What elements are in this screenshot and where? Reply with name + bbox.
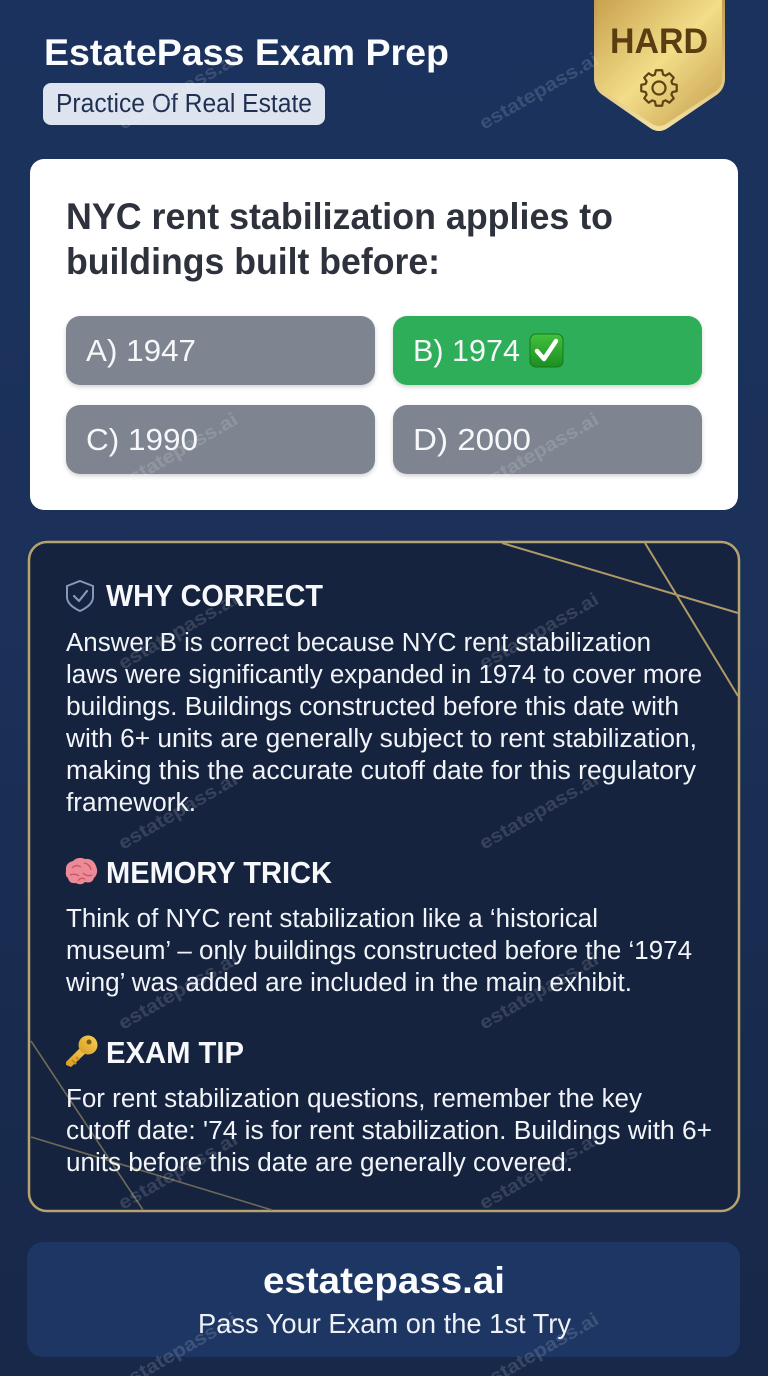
- watermarks: estatepass.ai: [115, 589, 242, 674]
- option D: [393, 405, 702, 474]
- heading: EXAM TIP: [106, 1036, 244, 1070]
- decorative gold lines: [31, 543, 738, 1210]
- heading: WHY CORRECT: [106, 579, 323, 613]
- body text: making this the accurate cutoff date for this regulatory: [66, 757, 696, 785]
- question card: [30, 159, 738, 510]
- body text: buildings. Buildings constructed before this date with: [66, 693, 679, 721]
- body text: with 6+ units are generally subject to rent stabilization,: [65, 725, 697, 753]
- brand: estatepass.ai: [263, 1260, 505, 1301]
- heading: MEMORY TRICK: [106, 856, 332, 890]
- watermarks: estatepass.ai: [115, 769, 242, 854]
- watermarks: estatepass.ai: [115, 49, 242, 134]
- option C: C) 1990: [86, 423, 198, 457]
- body text: units before this date are generally covered.: [66, 1149, 573, 1177]
- option B, correct answer: [393, 316, 702, 385]
- body text: cutoff date: '74 is for rent stabilization. Buildings with 6+: [66, 1117, 712, 1145]
- watermarks: estatepass.ai: [115, 949, 242, 1034]
- explanation panel: [29, 542, 739, 1211]
- body text: framework.: [66, 789, 196, 817]
- section: memory trick: [65, 856, 692, 997]
- watermarks: estatepass.ai: [476, 49, 603, 134]
- option B, correct answer: B) 1974: [413, 334, 520, 368]
- footer banner: [27, 1242, 740, 1357]
- body text: museum’ – only buildings constructed before the ‘1974: [66, 937, 692, 965]
- watermarks: estatepass.ai: [476, 589, 603, 674]
- body text: For rent stabilization questions, remember the key: [66, 1085, 642, 1113]
- body text: laws were significantly expanded in 1974 to cover more: [66, 661, 702, 689]
- section: why correct: [65, 579, 702, 817]
- difficulty badge: [594, 0, 725, 131]
- watermarks: estatepass.ai: [476, 769, 603, 854]
- subject tag: [43, 83, 325, 125]
- icon: key: [66, 1036, 98, 1067]
- header: title and subject tag: [43, 32, 449, 125]
- watermarks: estatepass.ai: [115, 1129, 242, 1214]
- body text: Answer B is correct because NYC rent stabilization: [66, 629, 651, 657]
- body text: wing’ was added are included in the main exhibit.: [65, 969, 632, 997]
- option D: D) 2000: [413, 423, 531, 457]
- icon: shield check: [67, 581, 93, 611]
- question text: [66, 196, 613, 282]
- icon: green check: [530, 334, 563, 367]
- body text: [65, 905, 692, 997]
- icon: gear: [641, 70, 677, 106]
- badge label: HARD: [610, 22, 708, 61]
- question text: NYC rent stabilization applies to: [66, 196, 613, 237]
- section: exam tip: [66, 1036, 712, 1177]
- icon: brain: [66, 858, 97, 884]
- option A: [66, 316, 375, 385]
- watermarks: [115, 49, 603, 1376]
- question text: buildings built before:: [66, 241, 440, 282]
- watermarks: estatepass.ai: [476, 409, 603, 494]
- tagline: Pass Your Exam on the 1st Try: [198, 1308, 571, 1339]
- body text: [65, 629, 702, 817]
- watermarks: estatepass.ai: [476, 1129, 603, 1214]
- body text: [66, 1085, 712, 1177]
- watermarks: estatepass.ai: [115, 409, 242, 494]
- subject tag: Practice Of Real Estate: [56, 90, 312, 118]
- watermarks: estatepass.ai: [476, 949, 603, 1034]
- body text: Think of NYC rent stabilization like a ‘historical: [66, 905, 598, 933]
- option A: A) 1947: [86, 334, 196, 368]
- option C: [66, 405, 375, 474]
- title: EstatePass Exam Prep: [44, 32, 449, 73]
